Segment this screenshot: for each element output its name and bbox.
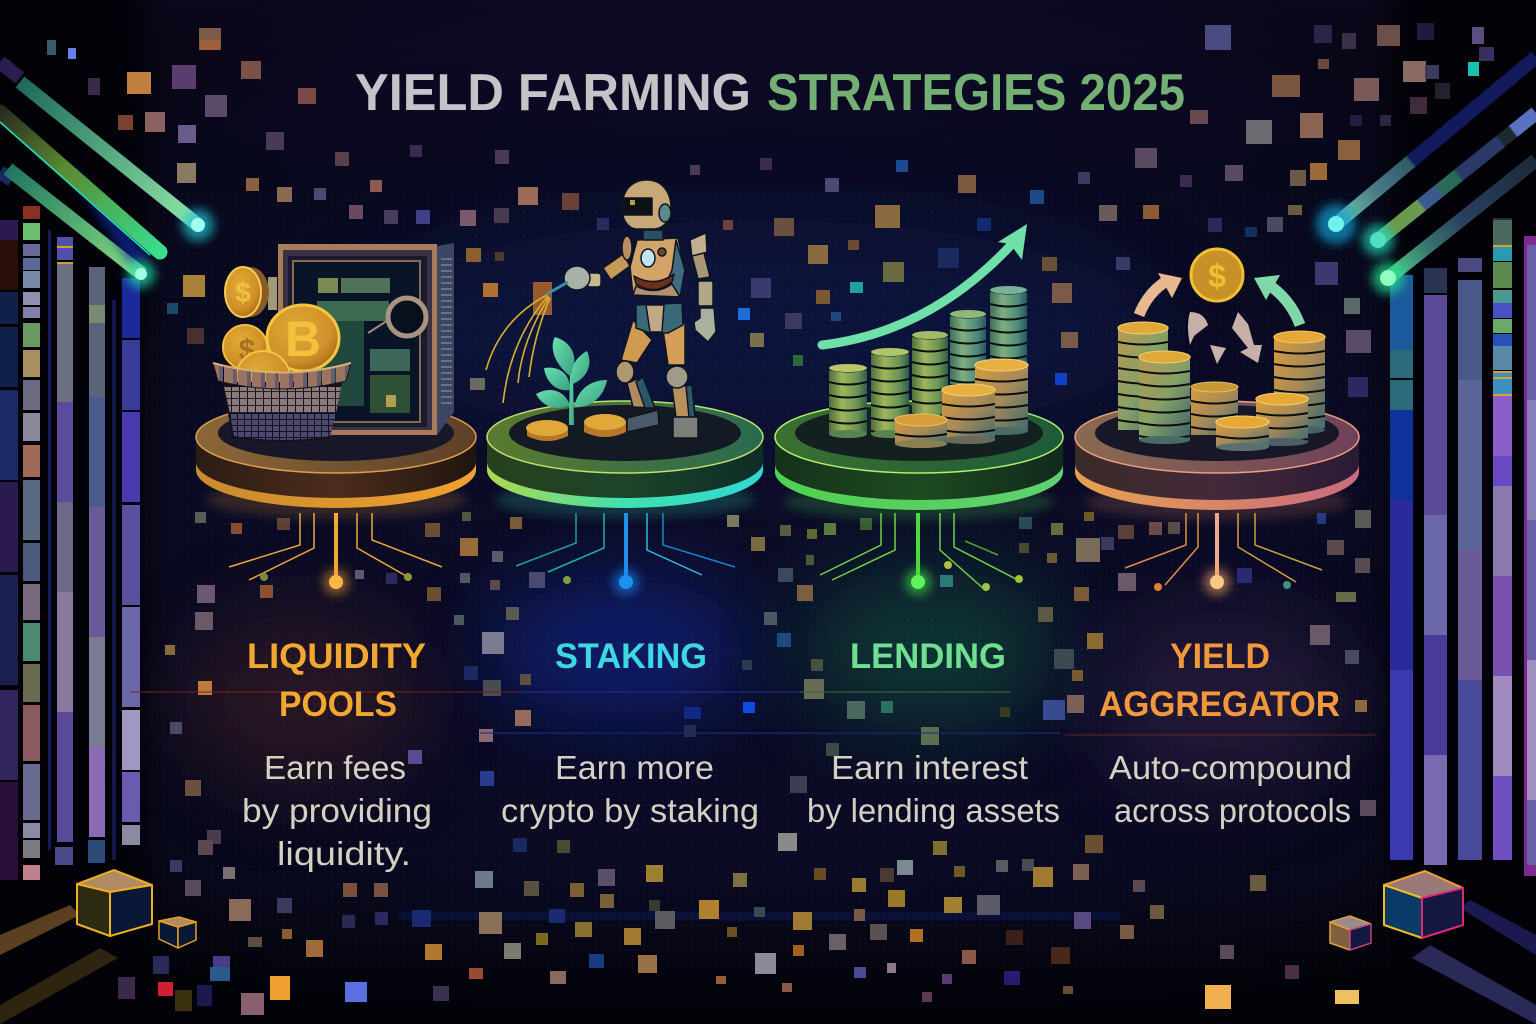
heading: liquidity pools: LIQUIDITY xyxy=(247,637,426,676)
icon: large cube right xyxy=(1384,871,1463,938)
chart: green coin stacks xyxy=(829,286,1028,448)
coin: left xyxy=(223,325,267,369)
arrow: green xyxy=(1254,275,1300,325)
light beams right xyxy=(1316,57,1536,294)
icon: plant and coins xyxy=(486,295,626,441)
gold coin stacks xyxy=(895,359,1028,448)
circuit: blue xyxy=(516,513,735,595)
heading: yield aggregator xyxy=(1099,637,1340,724)
vault safe xyxy=(278,243,454,435)
title: STRATEGIES 2025 xyxy=(767,64,1185,122)
right data columns xyxy=(1390,218,1536,876)
coin: left: $ xyxy=(239,334,256,367)
heading: yield aggregator: AGGREGATOR xyxy=(1099,685,1340,724)
circuit: peach xyxy=(1125,513,1322,595)
icon: robot xyxy=(547,180,716,438)
circuit: orange xyxy=(229,513,442,595)
robot torso xyxy=(630,230,685,297)
left data columns xyxy=(0,206,140,880)
robot pelvis xyxy=(636,303,683,333)
robot legs xyxy=(616,320,698,438)
text: lending description: Earn interest xyxy=(831,749,1028,786)
coin: bitcoin: B xyxy=(285,311,321,367)
coin: dollar top: $ xyxy=(235,277,251,308)
icon: small cube left xyxy=(159,917,196,948)
chart: yield coin stacks xyxy=(1118,322,1325,451)
coin: front xyxy=(236,351,290,405)
heading: lending: LENDING xyxy=(850,637,1006,676)
light beams left xyxy=(0,62,214,288)
divider lines xyxy=(130,692,1375,735)
robot arms xyxy=(547,233,716,342)
icon: growth arrow xyxy=(822,224,1027,345)
coin: dollar xyxy=(1191,249,1243,301)
icon: small cube right xyxy=(1330,916,1371,950)
text: lending description: by lending assets xyxy=(807,792,1060,829)
text: liquidity description: Earn fees xyxy=(264,749,406,786)
heading: staking: STAKING xyxy=(555,637,707,676)
panel: staking platform xyxy=(487,401,763,518)
panel: liquidity pools platform xyxy=(196,401,476,518)
text: staking description xyxy=(501,749,759,829)
icon: large cube left xyxy=(77,870,152,936)
woven basket xyxy=(213,363,351,442)
text: staking description: Earn more xyxy=(555,749,714,786)
coin: dollar top xyxy=(225,267,277,317)
coin: dollar: $ xyxy=(1208,258,1226,294)
text: aggregator description xyxy=(1109,749,1352,829)
robot head xyxy=(622,180,671,229)
heading: liquidity pools xyxy=(247,637,426,724)
title: YIELD FARMING xyxy=(355,64,751,122)
arrow: orange xyxy=(1139,273,1182,315)
heading: yield aggregator: YIELD xyxy=(1170,637,1270,676)
recycle shapes xyxy=(1188,312,1262,364)
panel: yield aggregator platform xyxy=(1075,401,1359,520)
title xyxy=(355,64,1185,122)
icon: compounding coin and arrows xyxy=(1139,249,1300,364)
heading: liquidity pools: POOLS xyxy=(279,685,397,724)
text: lending description xyxy=(807,749,1060,829)
corner diagonals xyxy=(0,900,1536,1024)
small coins xyxy=(526,414,626,441)
text: staking description: crypto by staking xyxy=(501,792,759,829)
plant xyxy=(536,337,607,425)
spray water xyxy=(486,295,550,403)
panel: lending platform xyxy=(775,401,1063,520)
text: liquidity description: liquidity. xyxy=(277,835,411,872)
circuit: green xyxy=(820,513,1023,595)
coin: bitcoin xyxy=(267,305,339,371)
text: liquidity description xyxy=(242,749,432,872)
text: aggregator description: Auto-compound xyxy=(1109,749,1352,786)
icon: basket and safe with coins xyxy=(213,243,454,442)
text: aggregator description: across protocols xyxy=(1114,792,1351,829)
text: liquidity description: by providing xyxy=(242,792,432,829)
